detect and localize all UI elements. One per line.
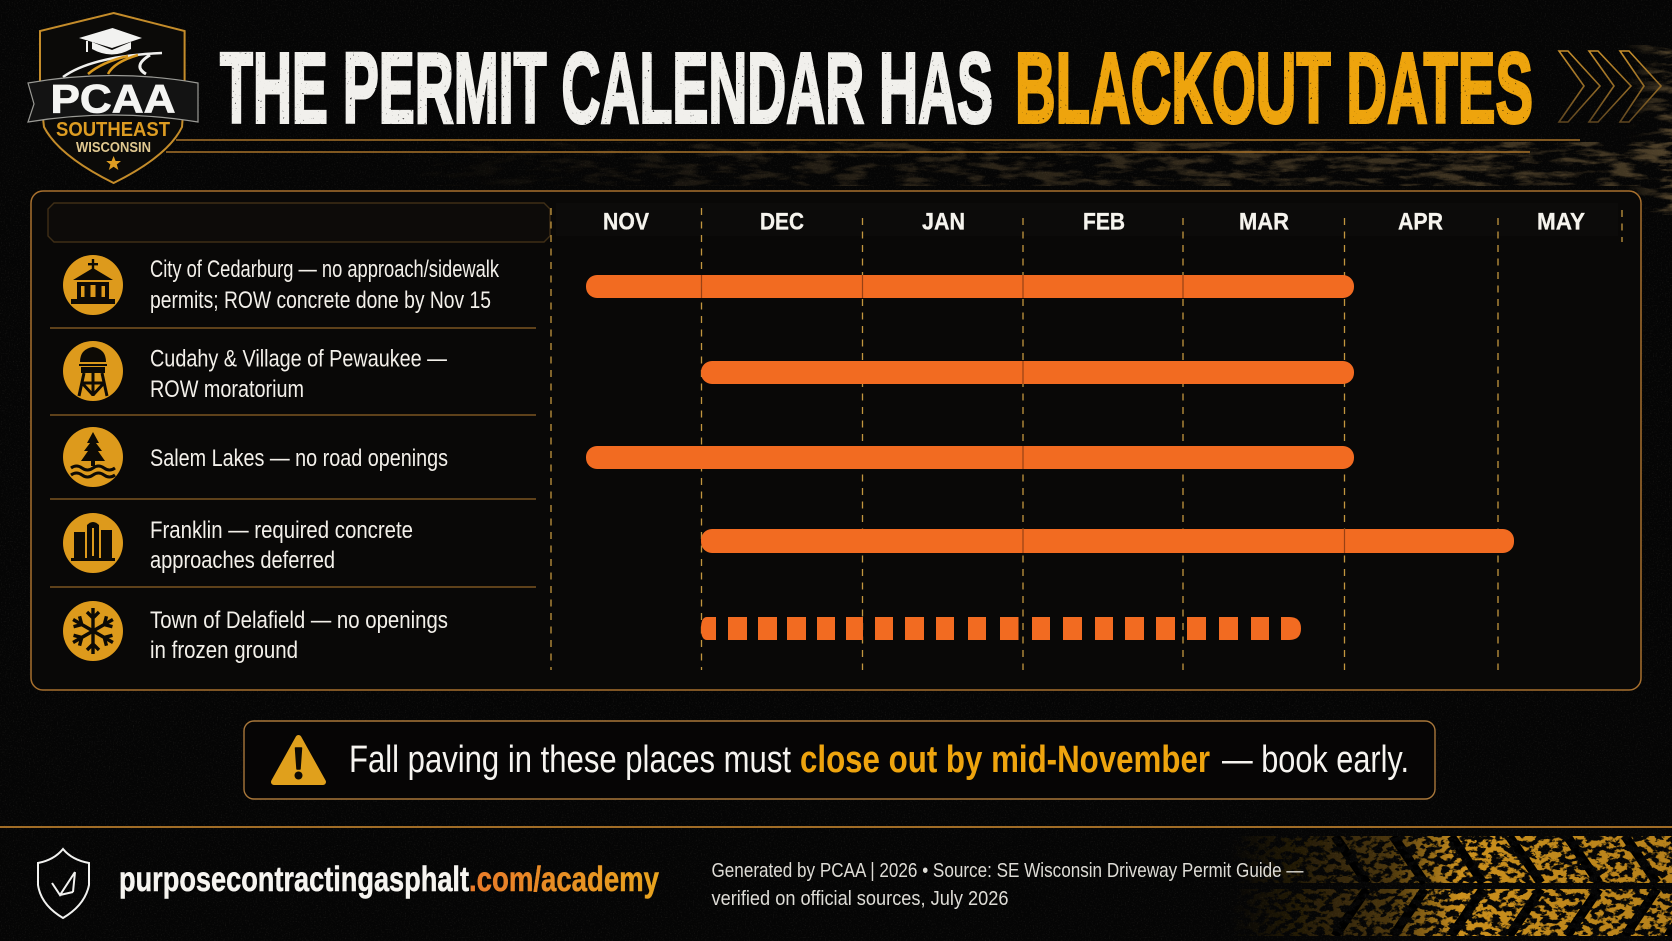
month labels: APR (1398, 208, 1443, 236)
header grunge band (420, 45, 1672, 215)
header chevrons (1559, 51, 1661, 122)
month labels: MAY (1537, 208, 1585, 236)
academy URL: purposecontractingasphalt (119, 860, 469, 899)
tire track texture (1230, 836, 1672, 936)
month labels (603, 208, 1585, 236)
month labels: NOV (603, 208, 649, 236)
row 2: Cudahy and Pewaukee (63, 341, 1354, 403)
month labels: JAN (922, 208, 965, 236)
row 5 text: in frozen ground (150, 637, 298, 664)
ribbon (28, 76, 198, 122)
SOUTHEAST: SOUTHEAST (56, 119, 170, 141)
row 1: City of Cedarburg (63, 255, 1354, 315)
footer divider (0, 826, 1672, 828)
icon: town hall (63, 255, 123, 315)
callout text: Fall paving in these places must (349, 739, 791, 781)
source note: verified on official sources, July 2026 (712, 887, 1008, 910)
row 3 bar (586, 446, 1354, 469)
icon: city buildings (63, 513, 123, 573)
header rule lines (166, 140, 1580, 152)
month labels: MAR (1239, 208, 1289, 236)
row 4 text (150, 517, 413, 574)
row 5 text (150, 607, 448, 664)
icon: snowflake (63, 601, 123, 661)
academy URL: .com/academy (469, 860, 659, 899)
star (106, 156, 121, 170)
row separators (50, 328, 536, 587)
row 4 bar (701, 529, 1514, 553)
icon: shield check (38, 849, 89, 918)
row 2 text: Cudahy & Village of Pewaukee — (150, 346, 447, 372)
footer (38, 849, 1304, 918)
row 5 text: Town of Delafield — no openings (150, 607, 448, 634)
row 1 text: City of Cedarburg — no approach/sidewalk (150, 256, 500, 283)
graduation cap (79, 28, 142, 54)
row 5 dashed bar (701, 617, 1301, 640)
road swoosh (63, 53, 162, 77)
month labels: DEC (760, 208, 804, 236)
PCAA: PCAA (50, 78, 176, 122)
icon: pine tree and water (63, 427, 123, 487)
row 3: Salem Lakes (63, 427, 1354, 487)
source note (712, 859, 1304, 910)
callout: close out by mid-November (244, 721, 1435, 799)
source note: Generated by PCAA | 2026 • Source: SE Wisconsin Driveway Permit Guide — (712, 859, 1304, 882)
row 3 text: Salem Lakes — no road openings (150, 445, 448, 472)
row 4 text: approaches deferred (150, 547, 335, 574)
row 4: Franklin (63, 513, 1514, 574)
icon: water tower (63, 341, 123, 401)
title white part: THE PERMIT CALENDAR HAS (220, 32, 993, 144)
row 4 text: Franklin — required concrete (150, 517, 413, 544)
logo badge: PCAA Southeast Wisconsin (28, 13, 198, 183)
row 2 text (150, 346, 447, 403)
callout text: close out by mid-November (800, 739, 1210, 781)
callout text: — book early. (1222, 739, 1409, 781)
empty header cell (48, 203, 550, 242)
WISCONSIN: WISCONSIN (76, 140, 151, 156)
row 2 text: ROW moratorium (150, 376, 304, 403)
month labels: FEB (1083, 208, 1125, 236)
panel: blackout calendar (31, 191, 1641, 690)
callout text (349, 739, 1409, 781)
icon: warning triangle (274, 738, 323, 782)
month header band (556, 203, 1618, 236)
row 1 bar (586, 275, 1354, 298)
month gridlines (551, 208, 1622, 670)
row 2 bar (701, 361, 1354, 384)
row 5: Town of Delafield (63, 601, 1301, 664)
title (220, 32, 1533, 144)
row 1 text (150, 256, 500, 314)
row 1 text: permits; ROW concrete done by Nov 15 (150, 287, 491, 314)
bar month ticks (702, 275, 1344, 553)
